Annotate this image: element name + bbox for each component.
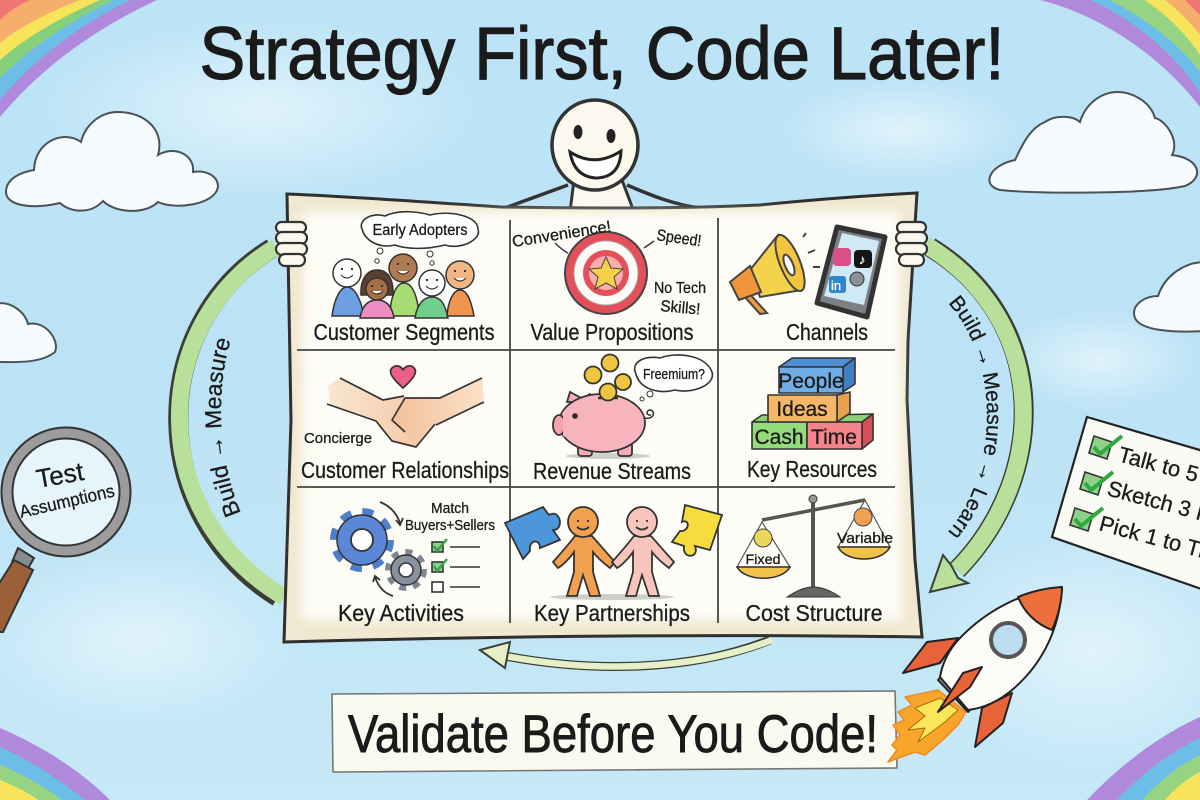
phone icon: in [831, 278, 841, 293]
cell: channels [730, 227, 885, 345]
block stack icon: People [778, 370, 844, 393]
arc text: right: Build → Measure → Learn [948, 294, 1000, 538]
cycle arrow: left [168, 240, 284, 606]
thought bubble: freemium [635, 355, 712, 391]
megaphone icon [730, 231, 820, 314]
label: value propositions: Value Propositions [530, 319, 694, 345]
figures holding hands [550, 507, 674, 600]
callout: speed: Speed! [655, 227, 702, 250]
callout: concierge: Concierge [304, 430, 372, 447]
balance scale icon: Fixed [746, 551, 780, 567]
block stack icon: Ideas [776, 398, 828, 421]
thought bubble: early adopters [361, 212, 478, 265]
label: key activities: Key Activities [338, 600, 464, 626]
cell: key activities [334, 500, 495, 626]
rocket flame [888, 690, 966, 762]
hand: right [896, 222, 927, 266]
callout: convenience: Convenience! [511, 219, 612, 251]
customer group [332, 254, 474, 318]
cell: key resources [747, 358, 877, 482]
hand: left [276, 222, 307, 266]
balance scale icon: Variable [837, 530, 893, 547]
label: cost structure: Cost Structure [746, 600, 882, 626]
checklist note [1052, 417, 1200, 592]
rainbow: top right [1040, 0, 1200, 107]
puzzle piece: yellow [672, 505, 722, 556]
rainbow: bottom right [1087, 717, 1200, 800]
cycle arrow: bottom [480, 640, 772, 668]
rainbow: bottom left [0, 728, 110, 800]
cell: customer segments [314, 212, 494, 345]
phone icon [817, 227, 885, 317]
label: channels: Channels [786, 319, 868, 345]
balance scale icon [737, 495, 893, 597]
magnifying glass: test assumptions [0, 433, 125, 632]
rocket [888, 587, 1062, 762]
gears icon [334, 502, 424, 596]
rainbow: top left [0, 0, 157, 117]
cloud: right edge [1134, 262, 1200, 332]
cell: value propositions: Skills! [660, 298, 701, 318]
label: revenue streams: Revenue Streams [533, 458, 691, 484]
cycle arrow: right [924, 238, 1034, 594]
callout: match buyers and sellers: Match [431, 500, 469, 517]
cloud: upper right [989, 92, 1197, 193]
cell: key partnerships [505, 505, 722, 626]
banner: Validate Before You Code! [348, 705, 878, 764]
callout: no tech skills: No Tech [654, 280, 706, 297]
thought bubble: freemium: Freemium? [643, 366, 705, 383]
piggy bank icon [553, 354, 653, 459]
block stack icon: Time [811, 426, 857, 449]
cloud: upper left [6, 112, 218, 211]
checklist icon [432, 539, 480, 592]
item: talk to 5: Talk to 5 [1116, 442, 1200, 487]
label: customer relationships: Customer Relationships [301, 457, 509, 483]
puzzle piece: blue [505, 507, 560, 559]
block stack icon [752, 358, 873, 449]
thought bubble: early adopters: Early Adopters [372, 222, 468, 239]
figure holding the canvas [505, 100, 700, 212]
cell: revenue streams [533, 354, 712, 484]
target icon [555, 232, 654, 314]
block stack icon: Cash [754, 426, 804, 449]
panel: business model canvas [284, 193, 922, 642]
item: talk to 5 [1089, 436, 1200, 487]
cell: value propositions [511, 219, 706, 345]
handshake icon [327, 366, 484, 447]
magnifying glass: test assumptions: Test [34, 456, 87, 494]
cell: customer relationships [301, 366, 509, 483]
cloud: left edge [0, 303, 56, 362]
label: customer segments: Customer Segments [314, 319, 494, 345]
magnifying glass: test assumptions: Assumptions [17, 481, 116, 522]
banner [332, 691, 897, 772]
cell: cost structure [737, 495, 893, 626]
phone icon: ♪ [859, 252, 866, 267]
cell: key activities: Buyers+Sellers [405, 517, 495, 534]
arc text: left: Build → Measure [204, 338, 240, 518]
label: key resources: Key Resources [747, 456, 877, 482]
title: Strategy First, Code Later! [200, 12, 1004, 95]
label: key partnerships: Key Partnerships [534, 600, 690, 626]
